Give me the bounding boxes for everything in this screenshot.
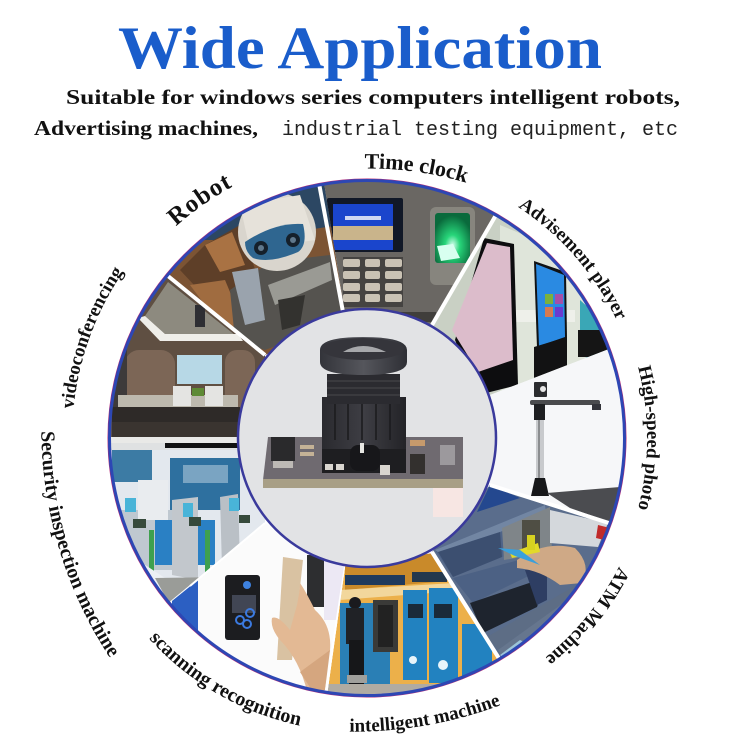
photo: videoconference room [111,278,265,443]
centre product circle [238,309,496,567]
subtitle line two [34,116,678,142]
board connector [433,488,463,517]
photo: security inspection gates [111,443,265,602]
title: Wide Application [118,15,602,81]
label: Security inspection machine: Security inspection machine [41,432,116,658]
photo: ATM machine [432,485,608,657]
subtitle line two: industrial testing equipment, etc [282,119,678,142]
label: Advisement player: Advisement player [518,200,625,318]
label: Time clock: Time clock [364,154,468,183]
label: ATM Machine: ATM Machine [546,566,628,664]
photo: intelligent recycling machine [328,553,497,694]
photo: scanning recognition [172,555,346,691]
photo: robot [170,186,344,355]
subtitle line one: Suitable for windows series computers intelligent robots, [66,85,680,109]
label: intelligent machine: intelligent machine [350,698,500,734]
photo: time clock [324,182,494,325]
label: Robot: Robot [166,176,232,226]
photo: advertisement player [432,218,608,395]
lens assembly [320,337,407,471]
label: scanning recognition: scanning recognition [150,634,300,726]
divider strokes [168,178,612,660]
outer ring [108,179,626,697]
label: High-speed photo: High-speed photo [638,364,660,510]
camera board [263,437,463,488]
photo: high-speed document camera [490,350,623,521]
label: videoconferencing: videoconferencing [62,266,126,408]
subtitle line two: Advertising machines, [34,116,258,140]
application wheel [100,170,645,715]
